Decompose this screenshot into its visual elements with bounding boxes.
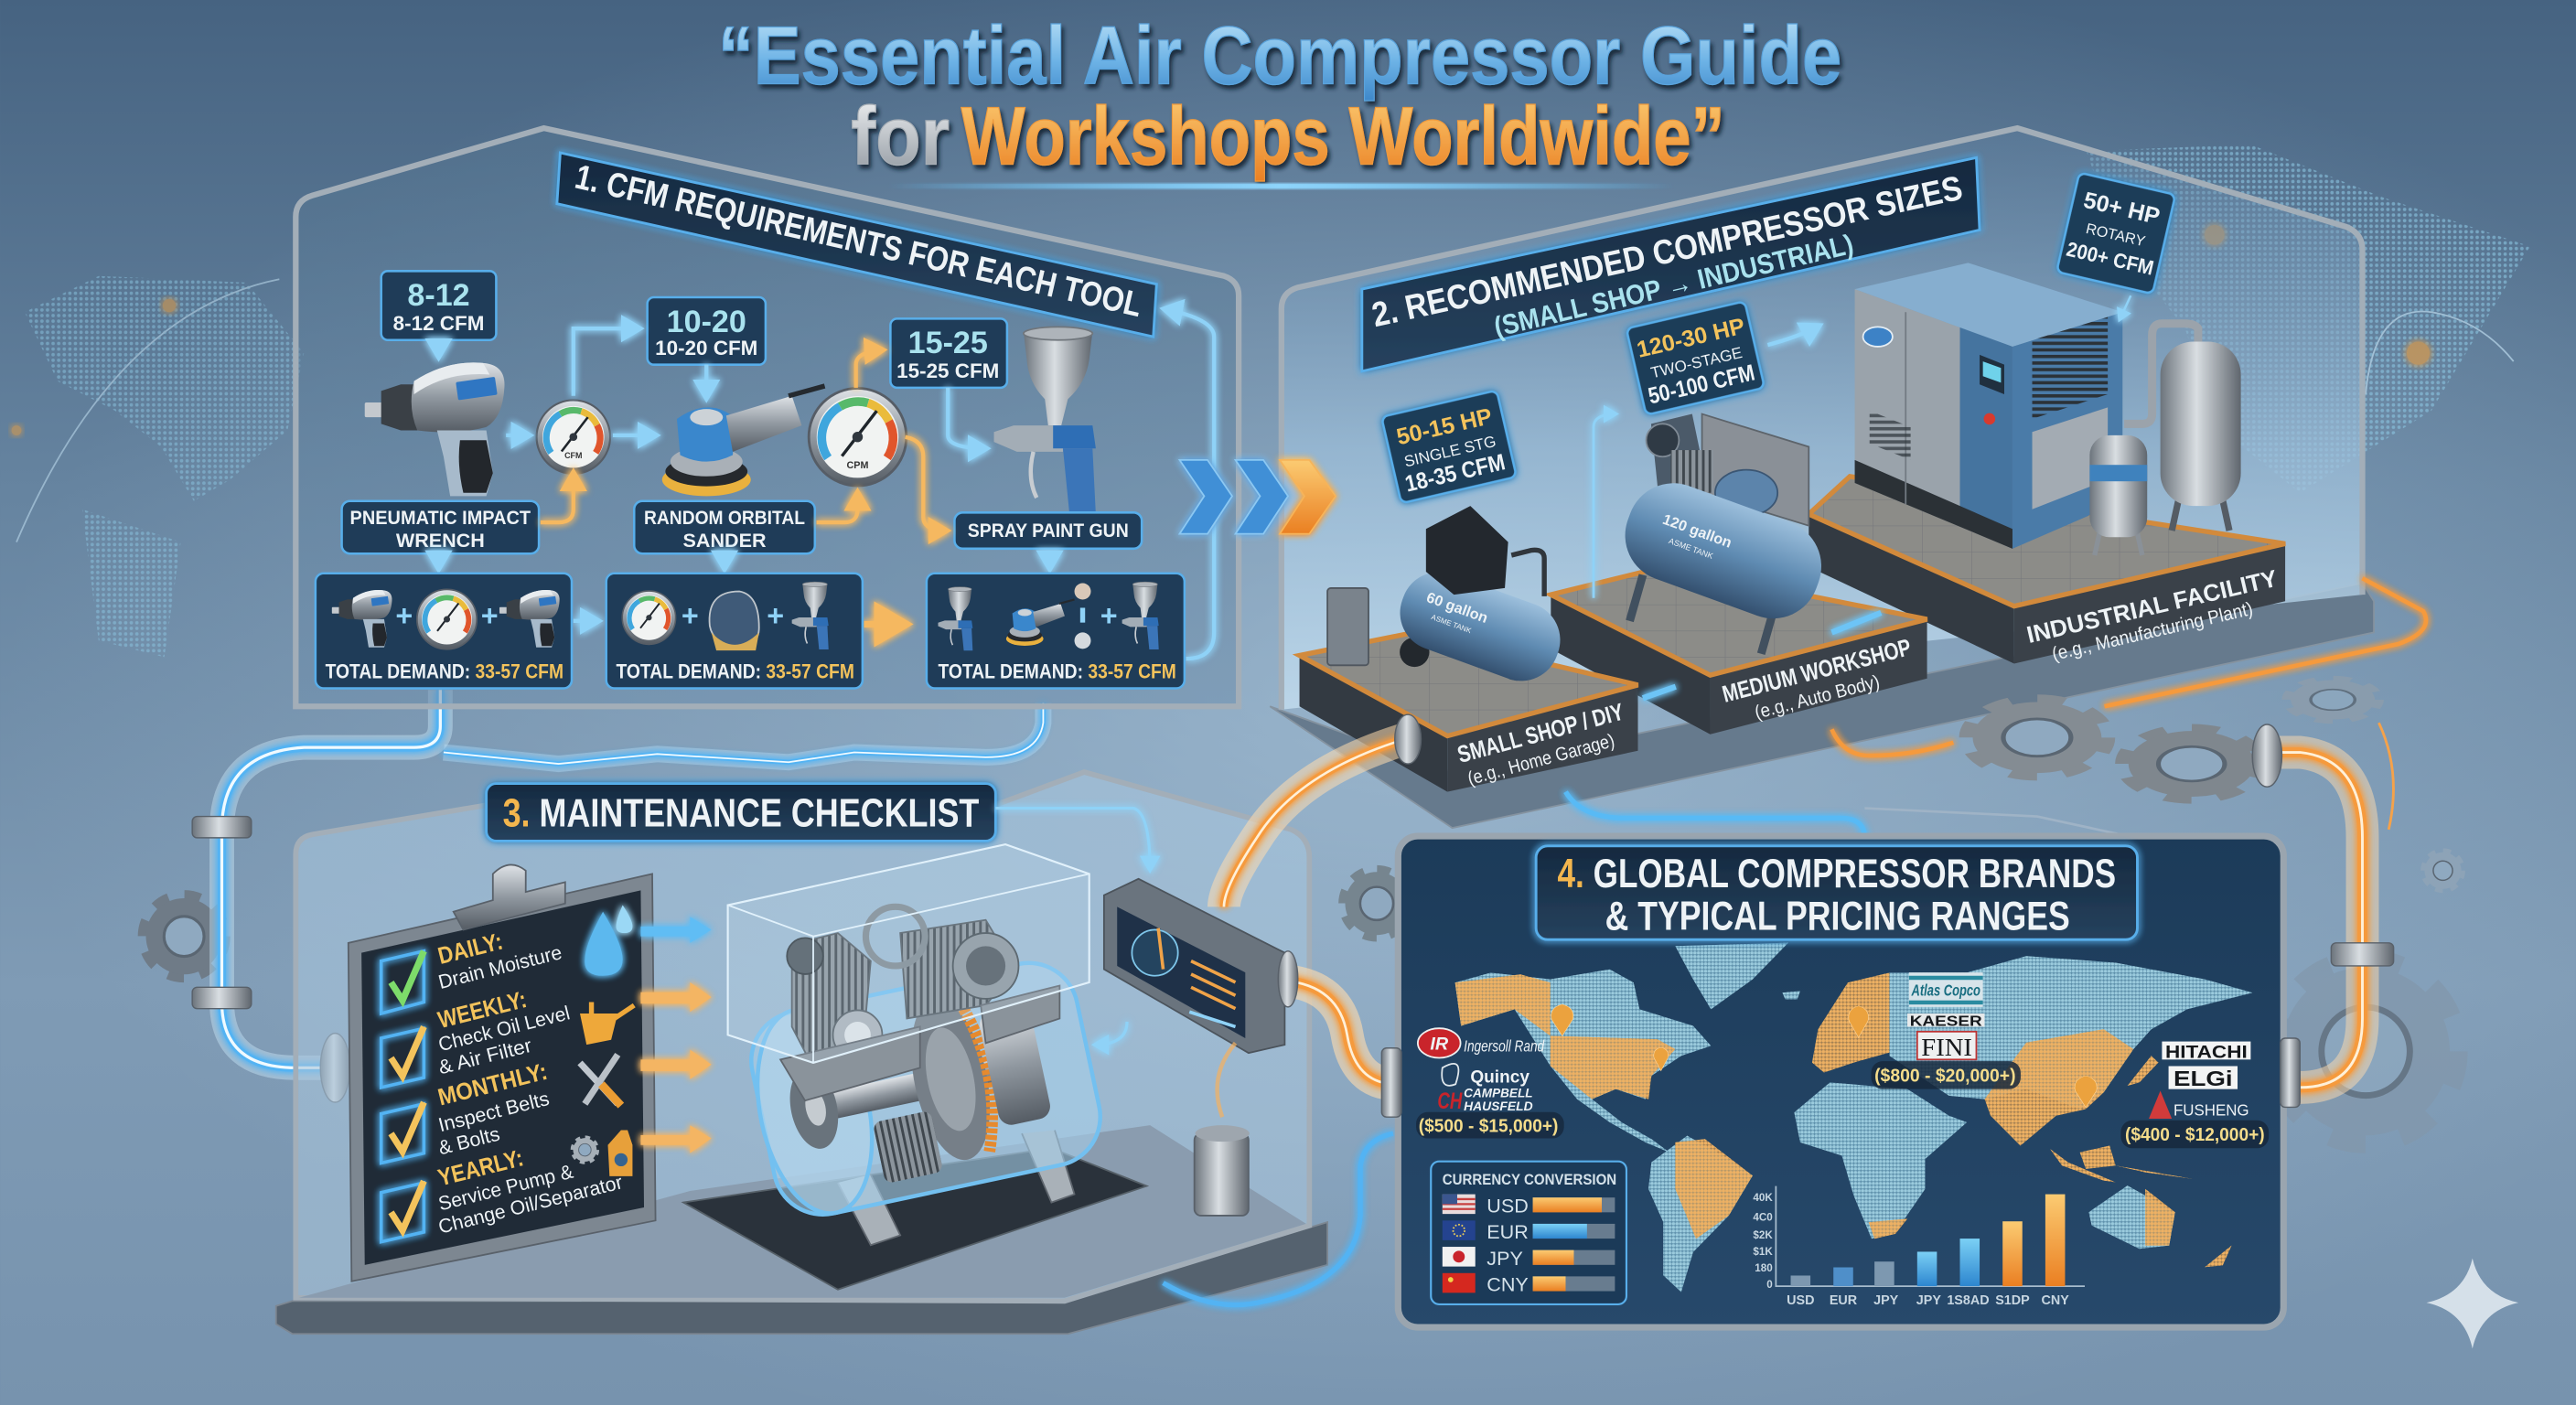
- panel 3 tile floor: [299, 1125, 1306, 1298]
- panel 3: maintenance checklist: [276, 772, 1327, 1334]
- y axis labels: 180: [1755, 1262, 1773, 1274]
- brands Asia: ELGi: [2174, 1067, 2233, 1090]
- panel 2 glass frame: [1282, 128, 2362, 710]
- brands Americas: CH: [1437, 1089, 1463, 1114]
- callout: industrial spec: 200+ CFM: [2065, 238, 2156, 280]
- total demand card 1: +: [481, 599, 499, 632]
- continents: [1455, 943, 2252, 1292]
- highlighted regions: [1455, 972, 2232, 1267]
- value 8-12: 8-12: [407, 278, 470, 313]
- x axis labels: JPY: [1873, 1293, 1899, 1308]
- bar chart: [1753, 1186, 2085, 1308]
- pipe: orange lines panel 2 to gears: [1831, 578, 2426, 756]
- text yearly: Service Pump &: [435, 1160, 576, 1215]
- icon: sander: [662, 386, 825, 496]
- glass box: [728, 844, 1089, 1063]
- panel 3 heading: [487, 784, 995, 841]
- text weekly: & Air Filter: [435, 1034, 534, 1078]
- checkbox weekly: [381, 1026, 424, 1088]
- text monthly: [435, 1057, 552, 1159]
- rotary compressor: [1855, 263, 2122, 549]
- pipe: orange to control panel: [1218, 739, 1405, 1117]
- brands Americas: HAUSFELD: [1464, 1099, 1533, 1113]
- text weekly: Check Oil Level: [435, 1001, 572, 1056]
- checkbox yearly: [381, 1181, 424, 1242]
- location pins: [1551, 1004, 2097, 1108]
- title: [718, 11, 1841, 183]
- arrows panel 2: [1594, 295, 2131, 698]
- brands Europe: KAESER: [1910, 1014, 1982, 1030]
- x axis labels: JPY: [1916, 1293, 1941, 1308]
- text yearly: Change Oil/Separator: [435, 1170, 625, 1239]
- panel 4 heading: & TYPICAL PRICING RANGES: [1605, 892, 2070, 938]
- panel 4 side connectors: [1381, 1038, 2300, 1117]
- total demand card 2: +: [767, 599, 784, 632]
- callout: medium workshop spec: 50-100 CFM: [1646, 359, 1757, 409]
- value 8-12: [381, 271, 496, 340]
- y axis labels: 40K: [1753, 1192, 1773, 1204]
- compressor cutaway: [728, 844, 1110, 1245]
- small platform: [1300, 632, 1638, 792]
- text monthly: & Bolts: [435, 1122, 502, 1159]
- brands Asia: ($400 - $12,000+): [2125, 1124, 2265, 1145]
- callout: medium workshop spec: 120-30 HP: [1635, 314, 1747, 363]
- icon: sparkle star: [2427, 1259, 2518, 1348]
- x axis labels: [1787, 1293, 2069, 1308]
- total demand card 2: +: [682, 599, 699, 632]
- panel 3 glass frame: [295, 772, 1309, 1301]
- compressor base plate: [683, 1148, 1147, 1290]
- icon: gear and oil bottle: [573, 1131, 632, 1176]
- text monthly: MONTHLY:: [435, 1057, 550, 1110]
- tool label spray gun: [954, 512, 1142, 549]
- text daily: Drain Moisture: [435, 940, 564, 993]
- value 15-25: [890, 318, 1007, 388]
- callout: small shop spec: [1381, 391, 1517, 503]
- value 10-20: 10-20 CFM: [655, 337, 757, 359]
- medium two-stage compressor: 120 gallon: [1660, 511, 1733, 552]
- icon: spray gun: [994, 327, 1096, 514]
- panel 2 heading text: 2. RECOMMENDED COMPRESSOR SIZES: [1368, 168, 1966, 334]
- callout: medium workshop spec: TWO-STAGE: [1649, 344, 1744, 381]
- icon: wrench and screwdriver: [580, 1055, 621, 1106]
- world map: [1455, 943, 2252, 1292]
- brands Asia: FUSHENG: [2174, 1100, 2249, 1119]
- brands Americas: ($500 - $15,000+): [1419, 1115, 1558, 1136]
- pipes: blue lower left: [221, 690, 1043, 1067]
- text monthly: Inspect Belts: [435, 1087, 552, 1136]
- brands Americas: Quincy: [1470, 1067, 1530, 1087]
- total demand card 3: +: [1100, 599, 1118, 632]
- CNY row: [1443, 1273, 1615, 1296]
- air receiver tanks: [2089, 324, 2241, 555]
- total demand card 2: TOTAL DEMAND: 33-57 CFM: [616, 660, 854, 683]
- brands Europe: [1872, 972, 2021, 1089]
- x axis labels: 1S8AD: [1947, 1293, 1990, 1308]
- small platform: (e.g., Home Garage): [1465, 730, 1616, 789]
- icon: water drop: [585, 906, 632, 976]
- brands Americas: IR: [1430, 1035, 1449, 1055]
- motor: [900, 920, 1015, 1018]
- currency conversion panel: [1431, 1162, 1626, 1304]
- total demand card 1: TOTAL DEMAND: 33-57 CFM: [326, 660, 564, 683]
- value 8-12: 8-12 CFM: [393, 312, 484, 335]
- y axis labels: 4C0: [1753, 1211, 1773, 1223]
- EUR row: EUR: [1487, 1220, 1529, 1243]
- blue line beneath panel 2: [1566, 792, 2136, 838]
- brands Americas: Ingersoll Rand: [1464, 1036, 1545, 1055]
- tool label wrench: [342, 501, 539, 553]
- tool label sander: [634, 501, 815, 553]
- JPY row: JPY: [1487, 1247, 1523, 1270]
- bars: [1791, 1195, 2065, 1286]
- panel 4 heading: [1536, 846, 2137, 939]
- total demand card 1: [316, 574, 572, 688]
- callout: small shop spec: 18-35 CFM: [1402, 449, 1508, 498]
- pipe coupling right: [2252, 724, 2394, 966]
- title underline glow: [887, 184, 1676, 188]
- panel 4 heading: 4. GLOBAL COMPRESSOR BRANDS: [1558, 850, 2116, 896]
- x axis labels: USD: [1787, 1293, 1814, 1308]
- x axis labels: EUR: [1830, 1293, 1858, 1308]
- tool label wrench: PNEUMATIC IMPACT: [350, 506, 531, 529]
- x axis labels: S1DP: [1995, 1293, 2030, 1308]
- total demand card 3: TOTAL DEMAND: 33-57 CFM: [938, 660, 1176, 683]
- currency conversion panel: CURRENCY CONVERSION: [1443, 1171, 1616, 1188]
- panel 1: CFM requirements: [295, 128, 1239, 706]
- total demand card 1: +: [395, 599, 413, 632]
- callout: industrial spec: ROTARY: [2085, 220, 2147, 250]
- brands Asia: HITACHI: [2165, 1043, 2248, 1063]
- USD row: [1443, 1194, 1615, 1217]
- small portable compressor: 60 gallon: [1424, 589, 1490, 627]
- brands Americas: CAMPBELL: [1464, 1087, 1533, 1100]
- panel 2 floor: [1270, 584, 2374, 828]
- medium platform: [1551, 567, 1927, 735]
- background gears: [144, 852, 2463, 1140]
- total demand card 3: [927, 574, 1185, 688]
- checkbox monthly: [381, 1102, 424, 1163]
- tool label wrench: WRENCH: [396, 529, 485, 552]
- brands Europe: FINI: [1921, 1034, 1972, 1061]
- feet: [838, 1131, 1075, 1245]
- value 15-25: 15-25: [908, 326, 988, 360]
- brands Americas: [1416, 1028, 1564, 1139]
- control panel: [1104, 879, 1284, 1053]
- y axis labels: $1K: [1753, 1246, 1773, 1258]
- callout: industrial spec: [2056, 173, 2175, 294]
- gauge 1: [537, 400, 610, 474]
- chevrons between panels 1 and 2: [1179, 460, 1336, 534]
- panel 3 floor: [276, 1222, 1327, 1334]
- callout: industrial spec: 50+ HP: [2081, 188, 2163, 230]
- medium platform: (e.g., Auto Body): [1753, 671, 1882, 724]
- callout: medium workshop spec: [1626, 301, 1765, 415]
- icon: oil can: [580, 1002, 634, 1045]
- value 10-20: [648, 297, 766, 365]
- clipboard: [349, 864, 656, 1282]
- pipe couplings left: [192, 817, 350, 1102]
- gauge 2: CPM: [847, 460, 868, 471]
- small portable compressor: ASME TANK: [1430, 613, 1473, 635]
- text weekly: WEEKLY:: [435, 985, 530, 1034]
- panel 2: recommended sizes: [1270, 128, 2374, 828]
- callout: small shop spec: 50-15 HP: [1394, 403, 1495, 450]
- tool label spray gun: SPRAY PAINT GUN: [968, 519, 1129, 542]
- panel 2 heading: [1362, 157, 1980, 371]
- industrial platform: [1809, 477, 2285, 665]
- value 10-20: 10-20: [667, 305, 746, 339]
- industrial platform: (e.g., Manufacturing Plant): [2050, 598, 2255, 665]
- value 15-25: 15-25 CFM: [896, 359, 999, 382]
- brands Europe: Atlas Copco: [1911, 981, 1980, 999]
- panel 3 heading text: 3. MAINTENANCE CHECKLIST: [503, 791, 979, 835]
- arrows to compressor: [640, 917, 712, 1153]
- y axis labels: [1753, 1192, 1773, 1291]
- tank glass cylinder: [740, 952, 1110, 1224]
- panel 1 glass frame: [295, 128, 1239, 706]
- medium platform: MEDIUM WORKSHOP: [1719, 633, 1914, 708]
- background world map right: [2087, 145, 2530, 493]
- pipe: blue to panel 4: [1164, 1133, 1393, 1305]
- panel 1 heading: [557, 153, 1156, 337]
- CNY row: CNY: [1487, 1273, 1529, 1296]
- mounting brackets: [780, 986, 1059, 1100]
- checkbox daily: [381, 951, 424, 1014]
- text daily: DAILY:: [435, 928, 505, 970]
- brands Asia: [2121, 1042, 2269, 1148]
- small platform: SMALL SHOP / DIY: [1454, 698, 1626, 768]
- industrial platform: INDUSTRIAL FACILITY: [2024, 564, 2280, 649]
- tool label sander: SANDER: [683, 529, 767, 552]
- background world map left: [12, 276, 304, 657]
- medium two-stage compressor: ASME TANK: [1668, 536, 1714, 561]
- panel 1 heading text: 1. CFM REQUIREMENTS FOR EACH TOOL: [572, 157, 1145, 324]
- title line 2: for: [851, 91, 950, 183]
- total demand card 2: [606, 574, 863, 688]
- panel 4 frame: [1398, 836, 2283, 1327]
- icon: impact wrench: [365, 362, 504, 496]
- EUR row: [1443, 1220, 1615, 1243]
- y axis labels: 0: [1766, 1279, 1773, 1291]
- small portable compressor: [1327, 506, 1571, 692]
- panel 2 heading text: (SMALL SHOP → INDUSTRIAL): [1491, 229, 1856, 343]
- gears centre: [1970, 679, 2377, 799]
- USD row: USD: [1487, 1194, 1529, 1217]
- pipe couplings orange: [1278, 714, 1421, 1007]
- flow arrows panel 1: [439, 309, 1214, 659]
- title line 2: Workshops Worldwide”: [961, 91, 1725, 183]
- gauge 1: CFM: [564, 451, 583, 460]
- y axis labels: $2K: [1753, 1229, 1773, 1241]
- text yearly: YEARLY:: [435, 1143, 526, 1191]
- tool label sander: RANDOM ORBITAL: [644, 506, 805, 529]
- gauge 2: [809, 388, 907, 486]
- arrows around control panel: [995, 809, 1150, 1045]
- panel 4: global brands: [1381, 836, 2300, 1327]
- medium two-stage compressor: [1612, 414, 1834, 654]
- title line 1: “Essential Air Compressor Guide: [718, 11, 1841, 102]
- pump block: [792, 933, 871, 1067]
- text weekly: [435, 985, 572, 1078]
- JPY row: [1443, 1247, 1615, 1270]
- filter canister: [1195, 1125, 1250, 1216]
- pipe: orange right: [2259, 723, 2393, 1088]
- brands Europe: ($800 - $20,000+): [1874, 1066, 2016, 1087]
- callout: small shop spec: SINGLE STG: [1402, 433, 1497, 470]
- x axis labels: CNY: [2042, 1293, 2069, 1308]
